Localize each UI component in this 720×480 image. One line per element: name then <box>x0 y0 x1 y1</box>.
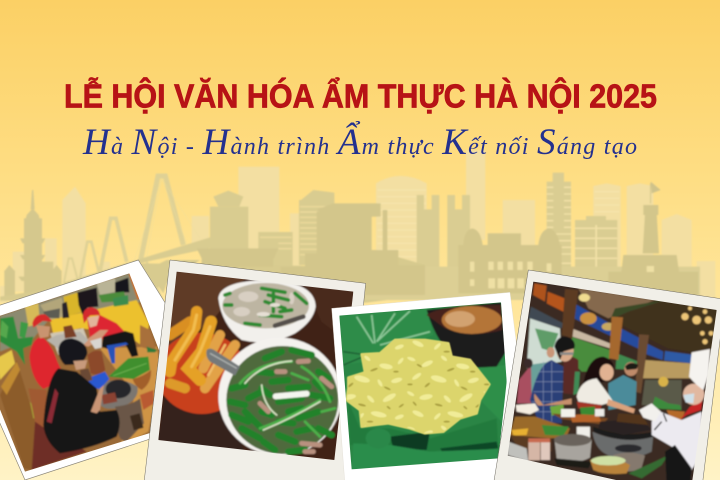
mortar <box>98 380 138 409</box>
small bowl <box>218 280 316 342</box>
opera house <box>458 245 562 293</box>
teal man <box>608 375 637 410</box>
polaroid frame 2 <box>143 260 366 480</box>
bowl <box>427 302 506 368</box>
skyline: left half <box>0 167 360 303</box>
photo scene 3 <box>337 300 513 473</box>
polaroid frame 1 <box>0 260 233 480</box>
flag tower <box>643 205 658 215</box>
polaroid frame 3 <box>332 292 522 480</box>
pillars <box>562 289 578 338</box>
pestle and glove <box>87 351 105 374</box>
left table foods <box>510 417 570 438</box>
plate <box>163 332 240 416</box>
back people <box>530 362 548 394</box>
chef <box>652 412 702 470</box>
back plants <box>652 397 682 410</box>
fried dough <box>170 312 235 388</box>
plant <box>0 317 33 365</box>
photo scene 1 <box>0 274 160 472</box>
skyline: right half <box>360 150 715 303</box>
cups bottles pot <box>577 427 590 439</box>
spoon <box>206 349 240 376</box>
photo scene 4 <box>505 278 718 480</box>
bridge deck <box>63 237 213 287</box>
title: LỄ HỘI VĂN HÓA ẨM THỰC HÀ NỘI 2025 <box>64 76 657 114</box>
ground <box>360 257 700 303</box>
baskets <box>613 453 645 472</box>
photo 2: pho and fried dough <box>143 260 366 480</box>
banners <box>574 304 612 336</box>
plaid man <box>530 360 563 423</box>
woman <box>583 357 614 385</box>
pagoda <box>4 190 62 301</box>
crate <box>0 372 35 470</box>
subtitle: Hà Nội - Hành trình Ẩm thực Kết nối Sáng tạo <box>82 120 637 163</box>
photo scene 2 <box>155 268 358 465</box>
grill <box>592 432 653 458</box>
floor <box>32 422 87 470</box>
chandeliers <box>681 306 713 344</box>
polaroid frame 4 <box>493 270 720 480</box>
photo 1: pounding green rice <box>0 260 165 480</box>
bridge arches <box>64 176 200 303</box>
big bowl <box>218 338 342 456</box>
photo 4: festival stall and chef <box>493 270 720 480</box>
window and foliage <box>527 318 562 368</box>
man left <box>29 337 61 389</box>
Hanoi skyline silhouette <box>0 150 715 303</box>
banana leaves <box>108 357 150 379</box>
man back <box>87 315 124 339</box>
ground <box>0 263 360 301</box>
foreground man <box>43 368 120 453</box>
photo 3: green rice on leaf <box>332 292 522 480</box>
sticky green rice <box>347 340 489 433</box>
mausoleum <box>197 203 360 287</box>
